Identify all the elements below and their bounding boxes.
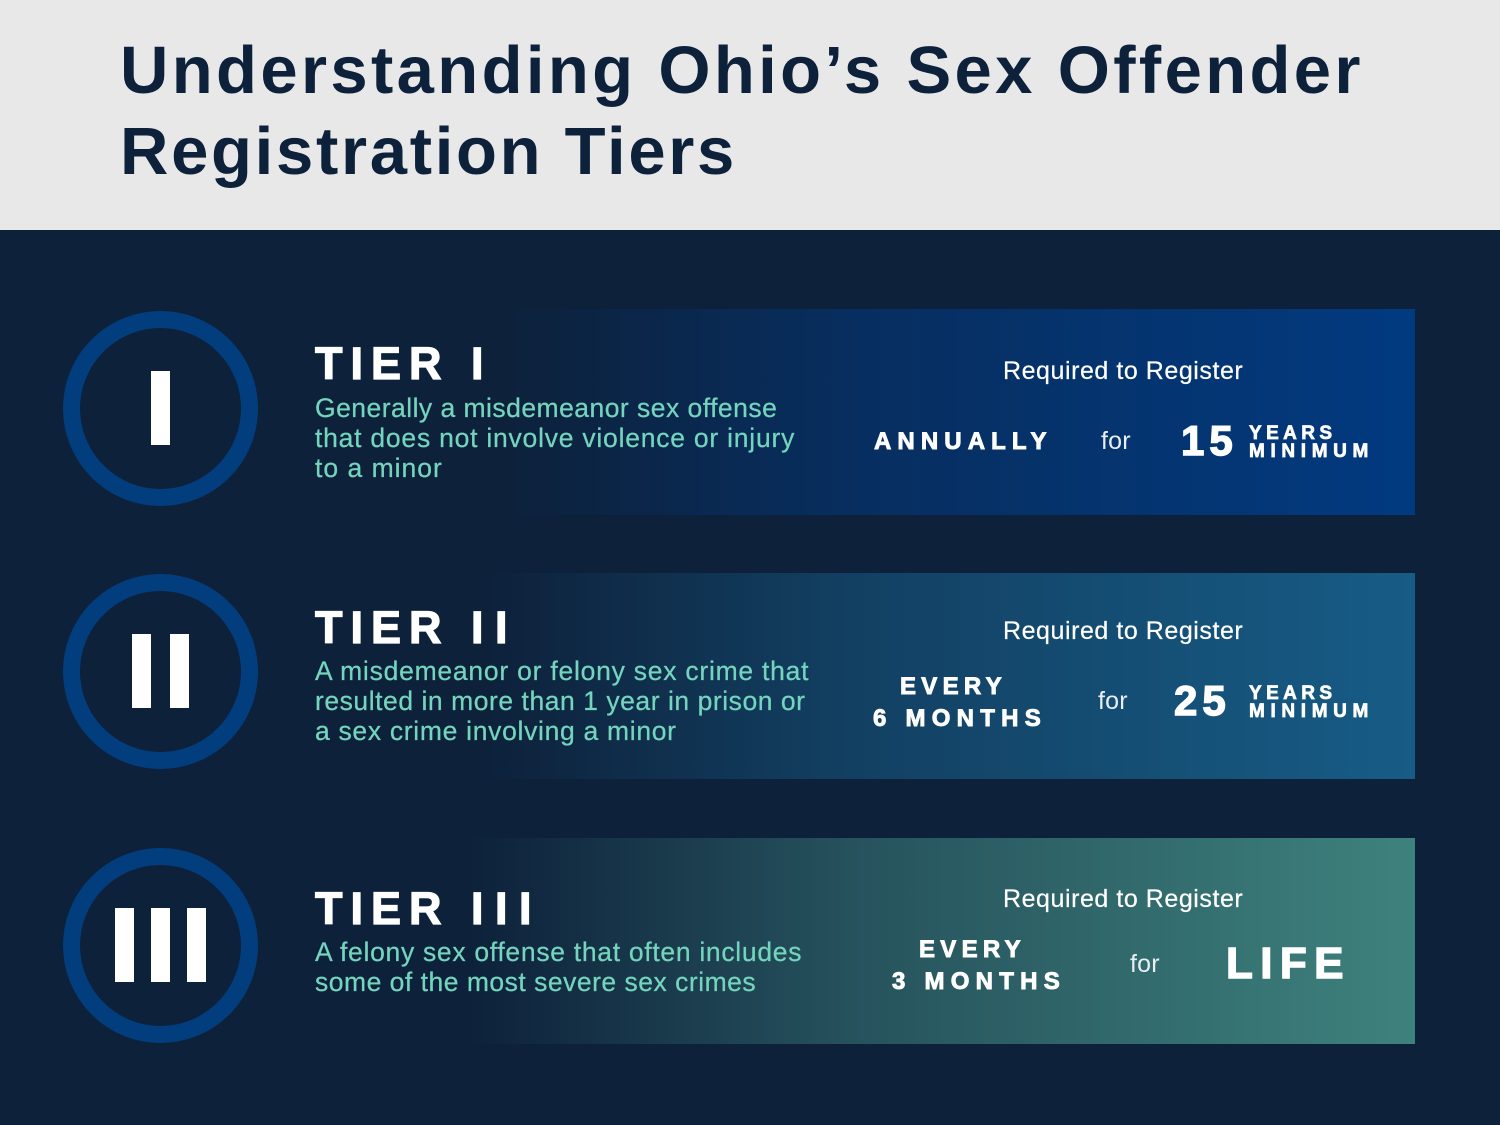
tier 2 description: A misdemeanor or felony sex crime that: [315, 656, 809, 686]
tier 1 description: Generally a misdemeanor sex offense: [315, 393, 777, 423]
title: Registration Tiers: [120, 114, 737, 189]
icon: tier 2 circle: [63, 574, 258, 769]
tier 1 description: [315, 393, 795, 483]
tier 2 heading: TIER II: [315, 602, 519, 653]
tier 1 description: that does not involve violence or injury: [315, 423, 795, 453]
tier 2 years minimum: YEARS: [1249, 683, 1336, 704]
tier 3 life: LIFE: [1226, 939, 1351, 988]
tier 3 description: A felony sex offense that often includes: [315, 937, 802, 967]
header band: [0, 0, 1500, 230]
tier 1 frequency: ANNUALLY: [874, 428, 1053, 455]
tier 2 years minimum: MINIMUM: [1249, 701, 1374, 722]
title: [120, 33, 1364, 189]
tier 2 required label: Required to Register: [1003, 617, 1243, 645]
tier 2 number: 25: [1174, 677, 1231, 724]
tier 1 description: to a minor: [315, 453, 443, 483]
panel: tier 3: [63, 838, 1415, 1044]
tier 2 description: [314, 656, 809, 746]
title: Understanding Ohio’s Sex Offender: [120, 33, 1364, 108]
tier 3 heading: TIER III: [315, 883, 543, 934]
panel: tier 1: [63, 309, 1415, 515]
tier 1 years minimum: [1248, 423, 1374, 462]
icon: tier 1 circle: [63, 311, 258, 506]
icon: tier 3 circle: [63, 848, 258, 1043]
tier 2 years minimum: [1248, 683, 1374, 722]
tier 2 description: resulted in more than 1 year in prison or: [315, 686, 806, 716]
tier 1 years minimum: YEARS: [1249, 423, 1336, 444]
tier 2 for: for: [1098, 687, 1128, 715]
tier 2 frequency: 6 MONTHS: [873, 705, 1047, 732]
tier 1 for: for: [1101, 427, 1131, 455]
tier 3 frequency: 3 MONTHS: [892, 968, 1066, 995]
tier 1 required label: Required to Register: [1003, 357, 1243, 385]
tier 3 for: for: [1130, 950, 1160, 978]
tier 1 heading: TIER I: [315, 338, 495, 389]
tier 2 frequency: [873, 673, 1047, 732]
tier 2 description: a sex crime involving a minor: [315, 716, 677, 746]
tier 3 required label: Required to Register: [1003, 885, 1243, 913]
tier 1 years minimum: MINIMUM: [1249, 441, 1374, 462]
tier 3 frequency: [892, 936, 1066, 995]
tier 2 frequency: EVERY: [900, 673, 1007, 700]
tier 3 description: [314, 937, 802, 997]
panel: tier 2: [63, 573, 1415, 779]
tier 3 description: some of the most severe sex crimes: [315, 967, 756, 997]
tier 1 number: 15: [1181, 417, 1238, 464]
tier 3 frequency: EVERY: [919, 936, 1026, 963]
